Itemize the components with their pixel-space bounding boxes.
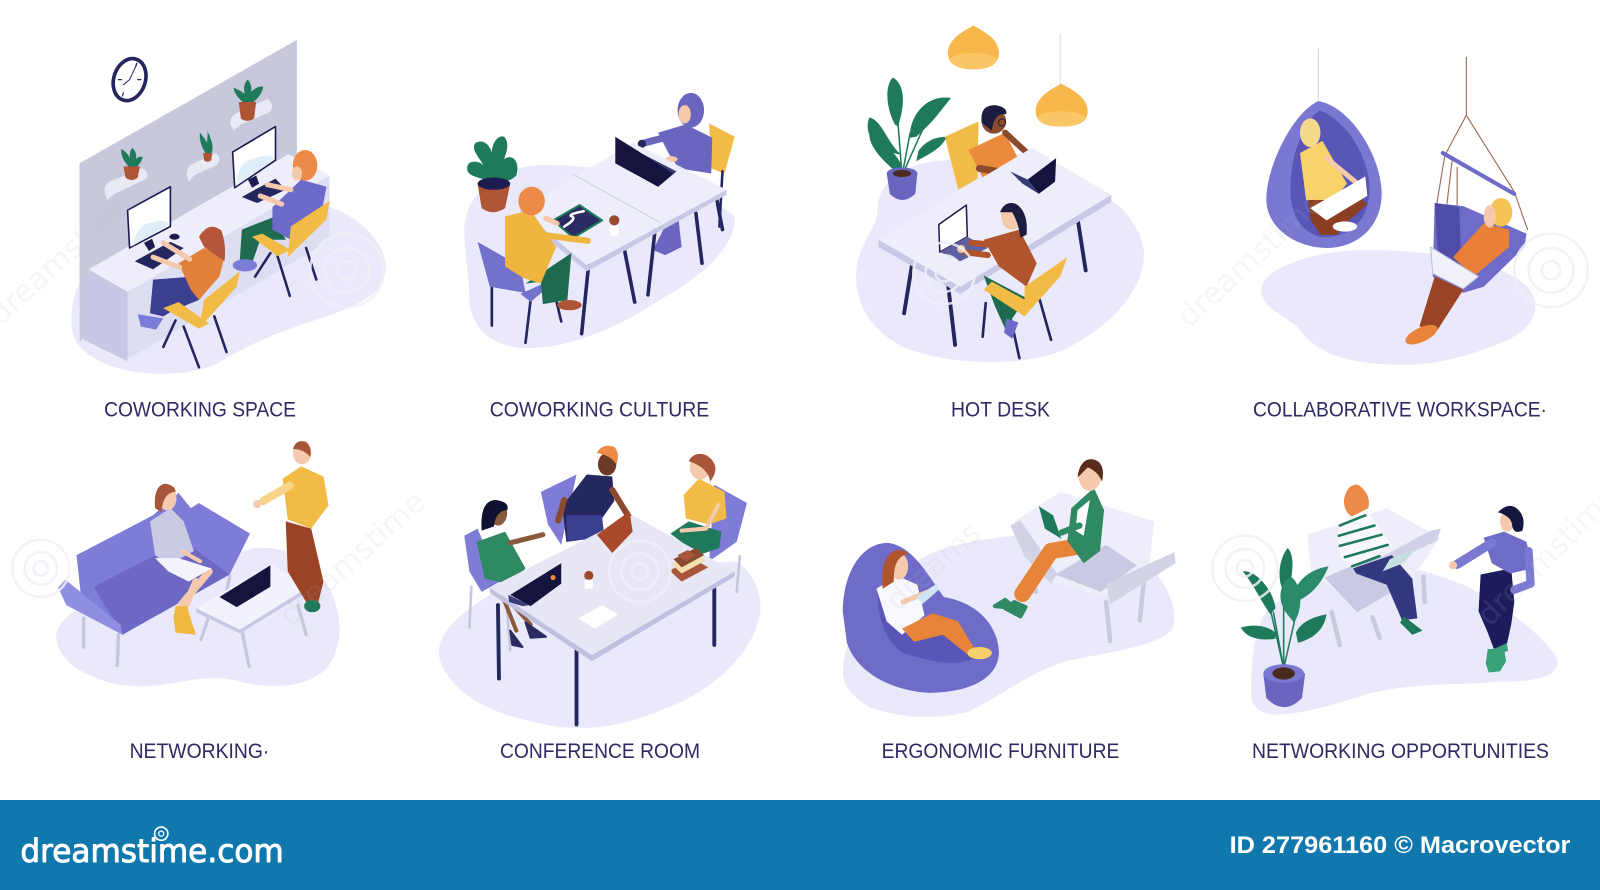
- coffee table and laptop: [196, 564, 309, 666]
- man reading: [995, 459, 1104, 616]
- image id and credit: ID 277961160 © Macrovector: [1230, 832, 1570, 859]
- floor blob: [464, 165, 735, 348]
- watermark text: [0, 183, 1600, 633]
- desk: [84, 154, 330, 361]
- icon: potted plant: [467, 136, 517, 212]
- person at front of desk with chair: [957, 203, 1067, 358]
- panel: coworking culture: [464, 93, 735, 348]
- standing man: [253, 441, 329, 612]
- laptops: [939, 158, 1056, 261]
- footer banner: [0, 800, 1600, 890]
- items on the table: [508, 511, 708, 629]
- label: coworking space: COWORKING SPACE: [104, 397, 296, 421]
- egg hanging chair with person: [1266, 49, 1382, 248]
- standing woman: [1449, 506, 1533, 672]
- panel: coworking space: [71, 40, 386, 374]
- person and chair at front desk: [138, 227, 240, 367]
- chairs: [464, 474, 747, 650]
- woman on chair: [1338, 485, 1422, 635]
- watermark text: dreams: [880, 515, 989, 618]
- label: networking: NETWORKING·: [130, 739, 269, 763]
- man in navy: [558, 446, 635, 542]
- panel: networking opportunities: [1241, 485, 1558, 715]
- panel: collaborative workspace: [1261, 49, 1535, 365]
- icon: tall plant in purple pot: [1241, 548, 1329, 707]
- table: [879, 148, 1111, 345]
- label: hot desk: HOT DESK: [951, 397, 1051, 421]
- panel: hot desk: [856, 26, 1144, 362]
- label: collaborative workspace: COLLABORATIVE WORKSPACE·: [1253, 397, 1547, 421]
- icon: tall potted plant: [868, 78, 951, 200]
- partition wall: [80, 40, 297, 342]
- woman in yellow: [670, 454, 727, 555]
- sofa: [58, 493, 250, 665]
- woman with dark hair: [477, 500, 546, 647]
- floor blob: [439, 561, 761, 728]
- hammock chair with person: [1403, 57, 1528, 348]
- seated woman: [150, 484, 211, 635]
- floor blob: [856, 153, 1144, 362]
- laptop: [615, 137, 677, 187]
- tablet and coffee: [553, 205, 619, 238]
- icon: wall clock: [108, 54, 151, 105]
- watermark text: dreamstime: [1171, 185, 1331, 335]
- label: conference room: CONFERENCE ROOM: [500, 739, 700, 763]
- conference table: [520, 143, 727, 334]
- label: ergonomic furniture: ERGONOMIC FURNITURE: [882, 739, 1119, 763]
- panel: conference room: [439, 446, 761, 728]
- floor blob: [56, 548, 340, 686]
- label: networking opportunities: NETWORKING OPPORTUNITIES: [1252, 739, 1549, 763]
- person and chair at rear desk: [233, 150, 330, 296]
- hanging lamps: [948, 26, 1088, 127]
- purple feet under the table: [653, 219, 682, 255]
- beanbag with woman: [843, 543, 999, 693]
- hijab woman and chair: [638, 93, 735, 227]
- armchair: [1010, 492, 1176, 641]
- floor blob: [843, 534, 1175, 717]
- floor blob: [1251, 558, 1558, 715]
- brand logo: dreamstime.com: [20, 834, 284, 870]
- floor blob: [71, 204, 386, 374]
- man with orange hair and chair: [478, 187, 588, 343]
- watermark swirls: [12, 234, 1588, 602]
- person at back of desk: [945, 105, 1033, 190]
- monitors and keyboards: [128, 127, 286, 269]
- table: [490, 515, 735, 724]
- floor blob: [1261, 250, 1535, 365]
- panel: networking: [56, 441, 340, 686]
- armchair: [1307, 508, 1441, 645]
- label: coworking culture: COWORKING CULTURE: [490, 397, 709, 421]
- watermark text: dreamstime: [273, 484, 433, 633]
- panel: ergonomic furniture: [843, 459, 1176, 717]
- wall shelves with plants: [104, 80, 272, 200]
